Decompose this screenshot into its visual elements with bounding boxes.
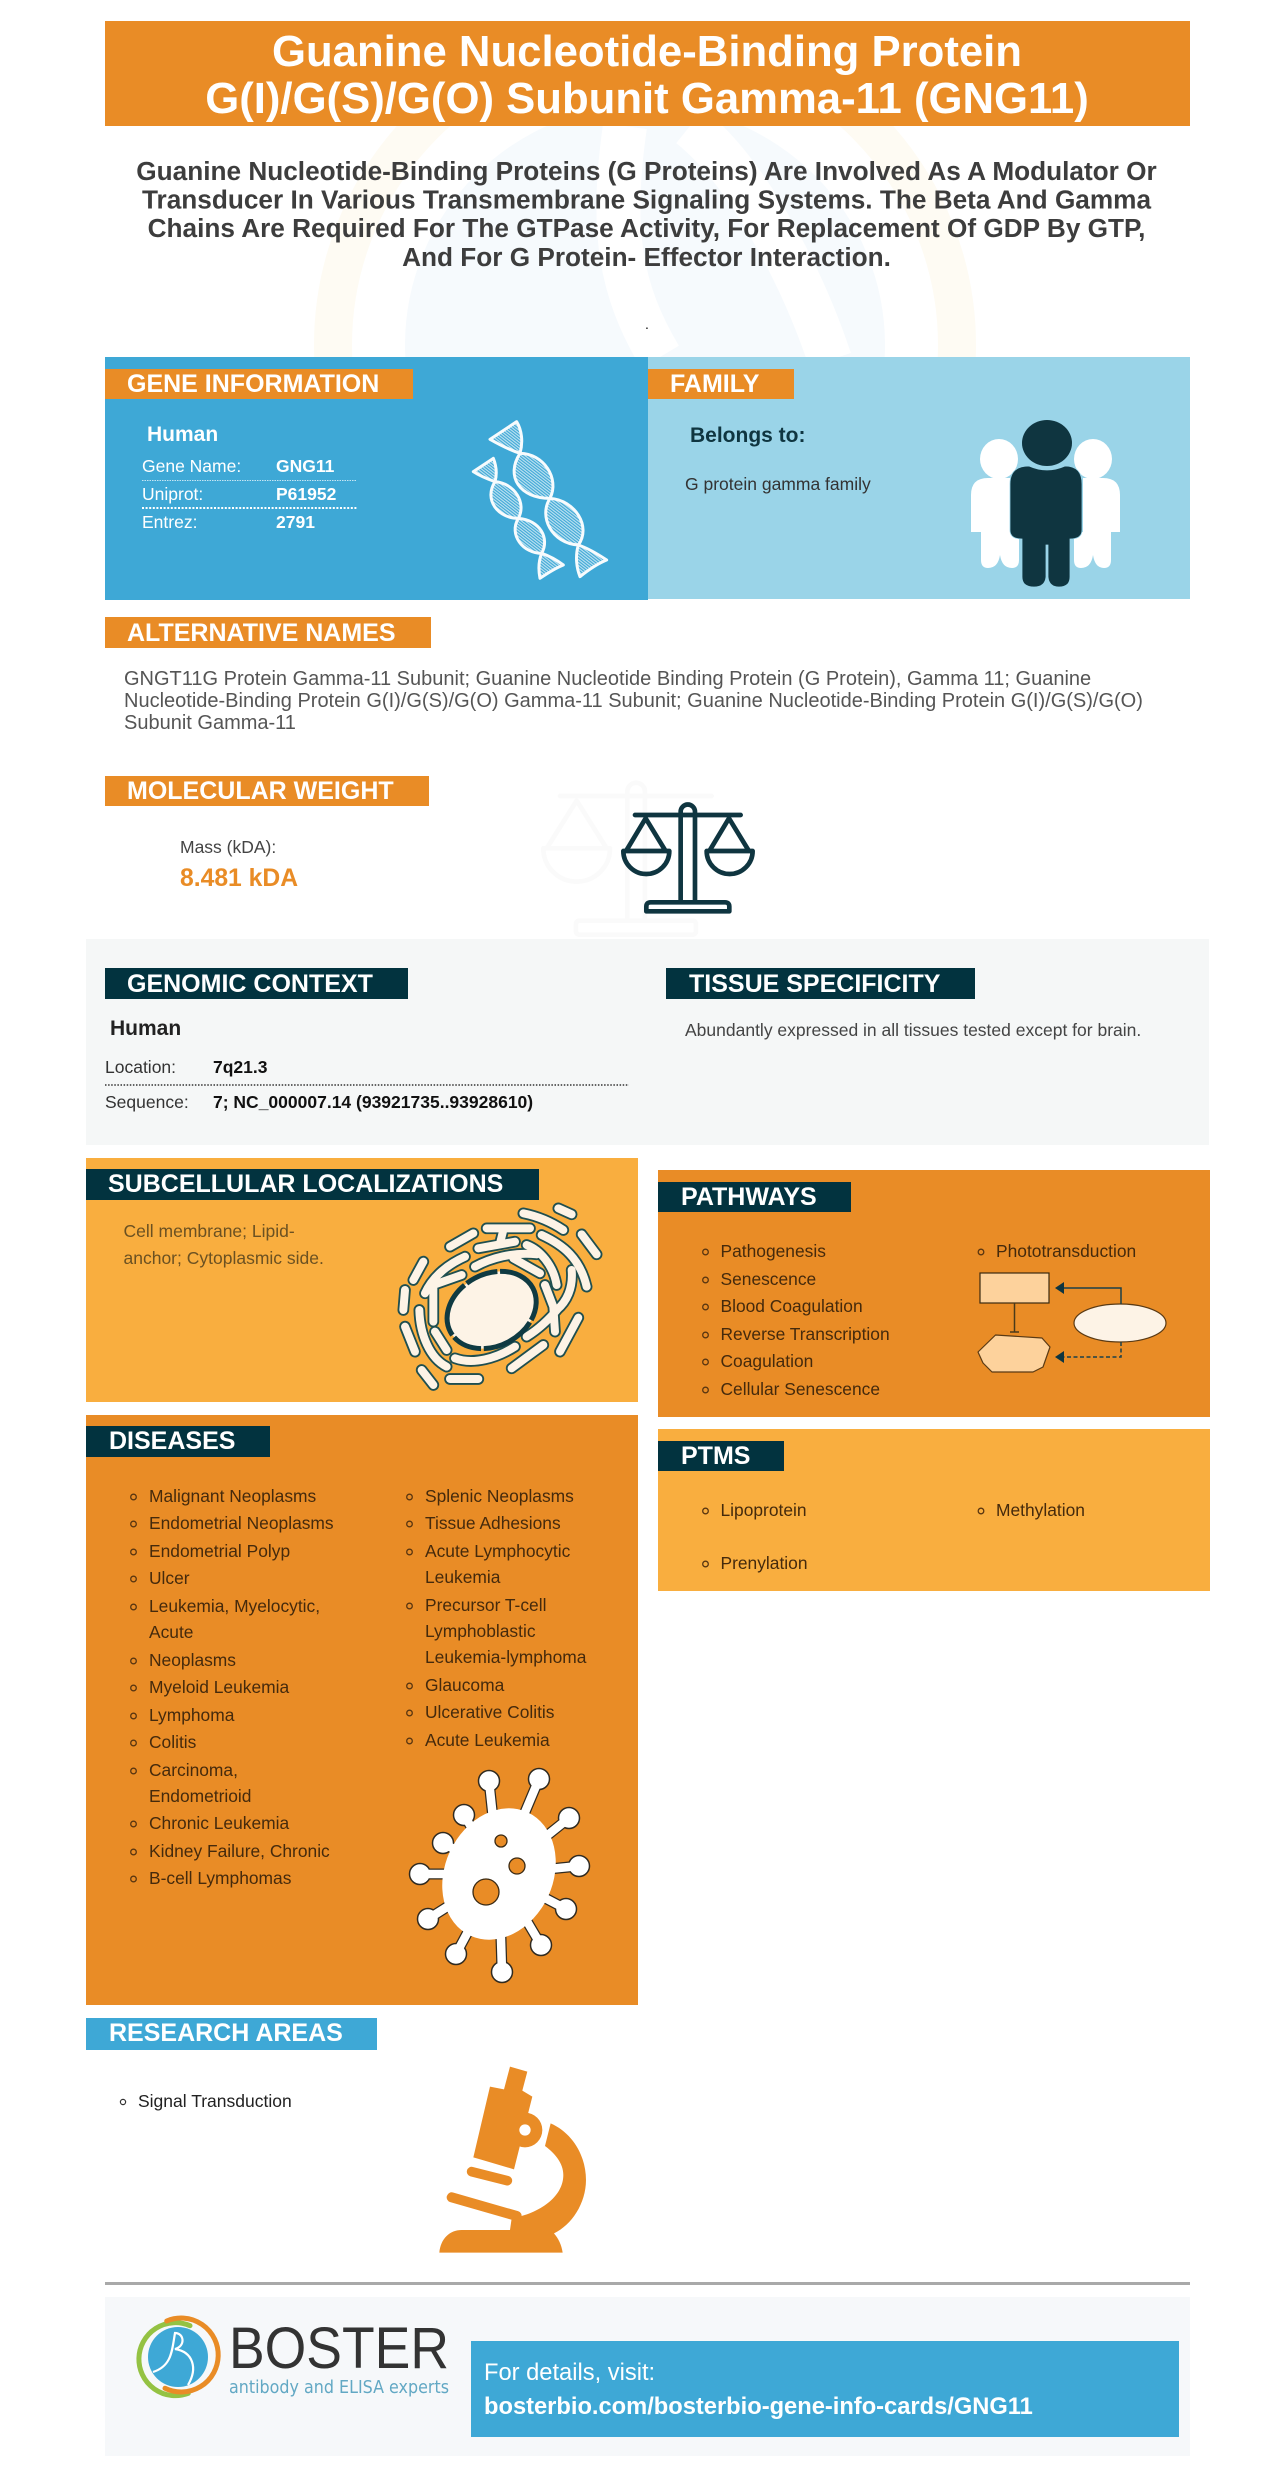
diseases list left: Endometrial Polyp	[149, 1541, 290, 1561]
diseases list left: Leukemia, Myelocytic,	[149, 1596, 320, 1616]
callout: details link	[471, 2341, 1179, 2437]
genomic table: Location:	[105, 1057, 176, 1077]
heading: tissue specificity: TISSUE SPECIFICITY	[689, 970, 941, 998]
diseases list left: Neoplasms	[149, 1650, 236, 1670]
pathways list: Coagulation	[720, 1351, 813, 1371]
diseases list right	[407, 1486, 587, 1750]
diseases list left: Endometrioid	[149, 1786, 251, 1806]
panel: genomic context and tissue specificity	[86, 939, 1209, 1145]
description: Guanine Nucleotide-Binding Proteins (G Proteins) Are Involved As A Modulator Or	[136, 156, 1157, 186]
gene table: 2791	[276, 512, 315, 532]
pathways list: Reverse Transcription	[720, 1324, 890, 1344]
divider	[105, 2282, 1190, 2285]
molecular weight value: 8.481 kDA	[180, 865, 298, 892]
molecular weight value: Mass (kDA):	[180, 837, 276, 857]
diseases list right: Ulcerative Colitis	[425, 1702, 555, 1722]
icon: microscope	[439, 2067, 586, 2253]
alternative names text: GNGT11G Protein Gamma-11 Subunit; Guanine Nucleotide Binding Protein (G Protein), Gamma 11; Guanine	[124, 668, 1091, 690]
diseases list left: Ulcer	[149, 1568, 190, 1588]
alternative names text: Nucleotide-Binding Protein G(I)/G(S)/G(O) Gamma-11 Subunit; Guanine Nucleotide-Binding Protein G(I)/G(S)/G(O)	[124, 690, 1143, 712]
icon: cell	[403, 1208, 597, 1385]
description	[136, 156, 1157, 272]
panel: gene information	[105, 357, 648, 600]
tissue text: Abundantly expressed in all tissues tested except for brain.	[685, 1020, 1141, 1040]
diseases list right: Lymphoblastic	[425, 1621, 536, 1641]
callout: details link: For details, visit:	[484, 2360, 655, 2386]
family text	[685, 424, 871, 494]
molecular weight value	[180, 837, 298, 892]
subcellular text: anchor; Cytoplasmic side.	[124, 1248, 324, 1268]
pathways list: Cellular Senescence	[720, 1379, 880, 1399]
diseases list left: Colitis	[149, 1732, 197, 1752]
alternative names text: Subunit Gamma-11	[124, 712, 296, 734]
diseases list right: Leukemia-lymphoma	[425, 1647, 587, 1667]
heading: ptms: PTMS	[681, 1442, 750, 1470]
diseases list left: Kidney Failure, Chronic	[149, 1841, 330, 1861]
diseases list left: Malignant Neoplasms	[149, 1486, 317, 1506]
diseases list right: Splenic Neoplasms	[425, 1486, 574, 1506]
pathways list: Phototransduction	[996, 1241, 1136, 1261]
subcellular text: Cell membrane; Lipid-	[124, 1221, 295, 1241]
pathways list: Blood Coagulation	[720, 1296, 863, 1316]
icon: pathway diagram	[978, 1273, 1166, 1372]
ptms list: Lipoprotein	[720, 1500, 807, 1520]
diseases list right: Acute Lymphocytic	[425, 1541, 571, 1561]
panel: family	[648, 357, 1190, 599]
pathways list	[703, 1241, 1136, 1399]
family text: G protein gamma family	[685, 474, 871, 494]
heading: subcellular localizations: SUBCELLULAR LOCALIZATIONS	[108, 1170, 503, 1198]
diseases list left: Acute	[149, 1622, 193, 1642]
diseases list right: Glaucoma	[425, 1675, 505, 1695]
description: Chains Are Required For The GTPase Activity, For Replacement Of GDP By GTP,	[148, 213, 1145, 243]
gene table: P61952	[276, 484, 337, 504]
gene table: Human	[147, 423, 218, 446]
diseases list left: Chronic Leukemia	[149, 1813, 289, 1833]
panel: subcellular localizations	[86, 1158, 638, 1402]
diseases list left: Endometrial Neoplasms	[149, 1513, 334, 1533]
icon: dna	[473, 422, 607, 578]
ptms list: Prenylation	[720, 1553, 808, 1573]
heading: family	[648, 369, 794, 399]
alternative names text	[124, 668, 1143, 734]
heading: diseases: DISEASES	[109, 1427, 235, 1455]
description: And For G Protein- Effector Interaction.	[402, 242, 891, 272]
diseases list left	[131, 1486, 334, 1888]
icon: virus	[410, 1768, 590, 1982]
pathways list: Pathogenesis	[720, 1241, 826, 1261]
boster logo: antibody and ELISA experts	[229, 2377, 449, 2398]
ptms list	[703, 1500, 1085, 1573]
boster logo	[139, 2316, 449, 2398]
diseases list left: Myeloid Leukemia	[149, 1677, 289, 1697]
description: Transducer In Various Transmembrane Signaling Systems. The Beta And Gamma	[142, 184, 1151, 214]
genomic table: 7; NC_000007.14 (93921735..93928610)	[213, 1092, 533, 1112]
heading: family: FAMILY	[670, 370, 760, 398]
diseases list left: Lymphoma	[149, 1705, 235, 1725]
family text: Belongs to:	[690, 424, 806, 447]
gene table: GNG11	[276, 456, 335, 476]
heading: pathways	[658, 1182, 851, 1212]
watermark logo	[314, 126, 976, 357]
gene table: Entrez:	[142, 512, 197, 532]
subcellular text	[124, 1221, 324, 1268]
ptms list: Methylation	[996, 1500, 1085, 1520]
genomic table	[105, 1017, 629, 1112]
diseases list left: Carcinoma,	[149, 1760, 238, 1780]
heading: ptms	[658, 1441, 784, 1471]
panel: footer	[105, 2297, 1190, 2456]
gene table: Gene Name:	[142, 456, 241, 476]
diseases list right: Leukemia	[425, 1567, 501, 1587]
icon: scales	[543, 783, 753, 935]
panel: pathways	[658, 1170, 1210, 1417]
diseases list left: B-cell Lymphomas	[149, 1868, 292, 1888]
gene table: Uniprot:	[142, 484, 203, 504]
heading: pathways: PATHWAYS	[681, 1183, 817, 1211]
callout: details link: bosterbio.com/bosterbio-gene-info-cards/GNG11	[484, 2394, 1033, 2420]
heading: molecular weight: MOLECULAR WEIGHT	[127, 777, 394, 805]
gene table	[142, 423, 357, 532]
title: G(I)/G(S)/G(O) Subunit Gamma-11 (GNG11)	[205, 74, 1089, 123]
heading: genomic context: GENOMIC CONTEXT	[127, 970, 373, 998]
title: Guanine Nucleotide-Binding Protein	[272, 27, 1022, 76]
genomic table: 7q21.3	[213, 1057, 268, 1077]
diseases list right: Precursor T-cell	[425, 1595, 546, 1615]
dot note: .	[645, 316, 649, 332]
icon: people	[971, 420, 1120, 587]
heading: research areas: RESEARCH AREAS	[109, 2019, 343, 2047]
heading: alternative names: ALTERNATIVE NAMES	[127, 619, 396, 647]
panel: ptms	[658, 1429, 1210, 1591]
heading: diseases	[86, 1426, 270, 1457]
panel: diseases	[86, 1415, 638, 2005]
research areas list: Signal Transduction	[138, 2091, 292, 2111]
boster logo: BOSTER	[229, 2316, 449, 2381]
diseases list right: Acute Leukemia	[425, 1730, 550, 1750]
heading: gene information: GENE INFORMATION	[127, 370, 379, 398]
genomic table: Human	[110, 1017, 181, 1040]
pathways list: Senescence	[720, 1269, 816, 1289]
title	[105, 21, 1190, 126]
diseases list right: Tissue Adhesions	[425, 1513, 561, 1533]
genomic table: Sequence:	[105, 1092, 189, 1112]
